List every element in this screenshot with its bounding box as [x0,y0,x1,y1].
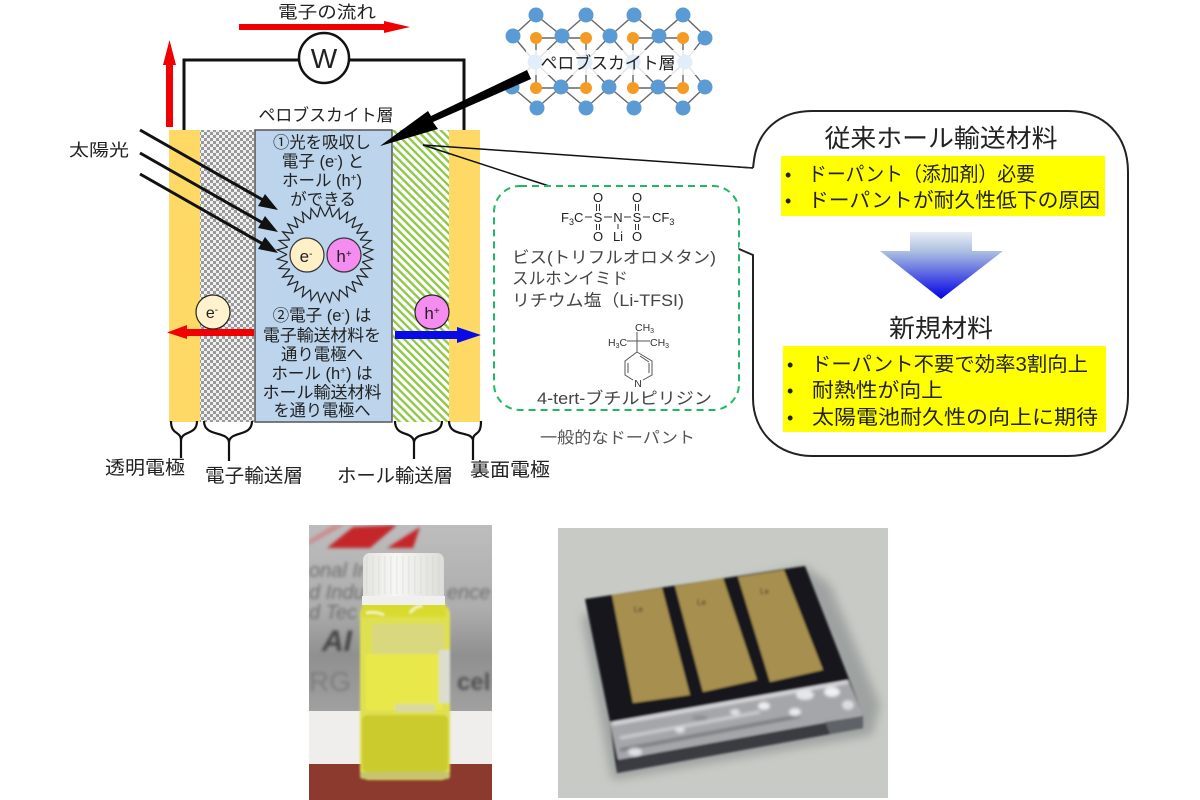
4-tert-butylpyridine structure: CH [635,322,650,334]
perovskite crystal diagram [504,8,712,116]
perovskite layer label: ペロブスカイト層 [258,105,394,125]
yellow box: new material benefits: • [787,355,793,375]
step 2 text: ) は [346,365,373,383]
step 1 text: ) [357,172,362,190]
step 2 text: ホール (h [271,365,340,383]
leader lines to dopant box and callout [423,145,753,186]
Li-TFSI structure: N [613,210,623,225]
Li-TFSI structure: 3 [569,217,574,227]
photo: yellow powder vial: d Tec [309,602,357,624]
thick black pointer arrow [380,70,531,146]
photo: solar cell device: Le [634,605,643,614]
yellow box: conventional drawbacks [781,156,1105,216]
step 1 text: ) と [338,153,364,171]
layer labels: ホール輸送層 [337,465,453,487]
step 2 text: ) は [345,307,371,325]
4-tert-butylpyridine structure: H [608,337,616,349]
photo: yellow powder vial: AI [321,625,353,658]
sunlight label: 太陽光 [69,141,129,160]
Li-TFSI name: スルホンイミド [512,270,628,288]
yellow box: new material benefits: 太陽電池耐久性の向上に期待 [812,406,1098,429]
external circuit with W load [184,33,464,131]
electron and hole pair [290,238,361,272]
photo: solar cell device: Le [760,587,769,596]
photo: solar cell device: Le [697,598,706,607]
layer labels [105,457,550,487]
step 2 text: ホール輸送材料 [262,383,382,402]
4-tert-butylpyridine structure: C [620,337,628,349]
Li-TFSI structure: S [633,210,642,225]
layer braces [171,421,481,461]
photo: yellow powder vial: ence [447,582,490,604]
Li-TFSI name [512,248,716,310]
layer labels: 透明電極 [105,457,185,479]
Li-TFSI structure: C [574,210,583,225]
photo: yellow powder vial: cel [457,669,490,696]
yellow box: new material benefits: 耐熱性が向上 [812,379,943,402]
Li-TFSI structure: Li [613,229,623,244]
4-tert-butylpyridine structure: 3 [665,343,669,350]
Li-TFSI structure: O [632,190,642,205]
electron and hole pair: + [346,249,352,260]
4-tert-butylpyridine structure: CH [650,337,665,349]
step 1 text: ができる [290,190,356,209]
hole moving: h [424,304,434,323]
layer labels: 電子輸送層 [205,465,303,487]
layer labels: 裏面電極 [470,459,550,481]
Li-TFSI name: リチウム塩（Li-TFSI) [512,291,684,310]
4-tert-butylpyridine structure [608,322,669,390]
4-tert-butylpyridine structure: 3 [616,343,620,350]
photo: yellow powder vial: onal In [309,560,369,582]
electron moving [196,295,230,329]
electron extraction arrow [167,325,254,339]
solar cell stack [169,130,480,422]
yellow box: new material benefits: ドーパント不要で効率3割向上 [811,353,1088,376]
external circuit with W load: W [311,43,338,74]
step 2 text: を通り電極へ [274,401,370,420]
yellow box: new material benefits [783,346,1106,432]
hole moving: + [434,306,440,317]
heading: conventional material: 従来ホール輸送材料 [824,125,1058,153]
sunlight arrows [140,130,278,253]
Li-TFSI structure: CF [652,210,669,225]
callout panel [738,111,1128,456]
step 1 text: + [351,173,357,184]
step 2 text: - [341,308,345,319]
general dopant caption: 一般的なドーパント [540,429,695,447]
hole extraction arrow [395,327,481,343]
photo: yellow powder vial: d Indu [309,582,365,604]
Li-TFSI name: ビス(トリフルオロメタン) [512,248,716,267]
dopant dashed box [494,186,739,410]
hole moving [415,295,449,329]
electron moving: - [215,305,218,316]
starburst exciton [277,206,373,303]
4-tert-butylpyridine structure: N [634,378,642,390]
photo: yellow powder vial: RG [309,666,351,697]
step 2 text [262,306,382,420]
step 2 text: 通り電極へ [281,345,363,364]
photo: solar cell device [558,528,888,798]
electron flow label: 電子の流れ [278,3,376,22]
yellow box: conventional drawbacks: • [785,165,791,185]
electron and hole pair: - [309,249,312,260]
step 1 text: - [334,154,338,165]
yellow box: new material benefits: • [787,381,793,401]
Li-TFSI structure: O [593,229,603,244]
yellow box: new material benefits: • [787,408,793,428]
perovskite crystal diagram: ペロブスカイト層 [540,53,676,73]
Li-TFSI structure: O [593,190,603,205]
step 1 text: ①光を吸収し [273,133,371,152]
step 1 text: 電子 (e [282,153,334,171]
Li-TFSI structure: 3 [669,217,674,227]
step 2 text: ②電子 (e [273,307,341,325]
photo: yellow powder vial [309,525,492,800]
red upward current arrow [163,40,176,127]
electron and hole pair: h [336,247,346,266]
electron flow label [239,3,410,33]
electron moving: e [206,305,215,322]
4-tert-butylpyridine name: 4-tert-ブチルピリジン [537,388,712,408]
electron and hole pair: e [300,247,309,266]
yellow box: conventional drawbacks: ドーパントが耐久性低下の原因 [808,189,1100,212]
Li-TFSI structure: F [561,210,569,225]
yellow box: conventional drawbacks: ドーパント（添加剤）必要 [808,163,1035,186]
yellow box: conventional drawbacks: • [785,191,791,211]
step 1 text: ホール (h [282,172,351,190]
step 2 text: 電子輸送材料を [263,326,381,345]
gradient down arrow [880,232,1003,299]
step 2 text: + [340,366,346,377]
Li-TFSI structure [561,190,674,244]
Li-TFSI structure: O [632,229,642,244]
step 1 text [273,133,371,209]
heading: new material: 新規材料 [889,315,993,343]
4-tert-butylpyridine structure: 3 [650,328,654,335]
Li-TFSI structure: S [594,210,603,225]
